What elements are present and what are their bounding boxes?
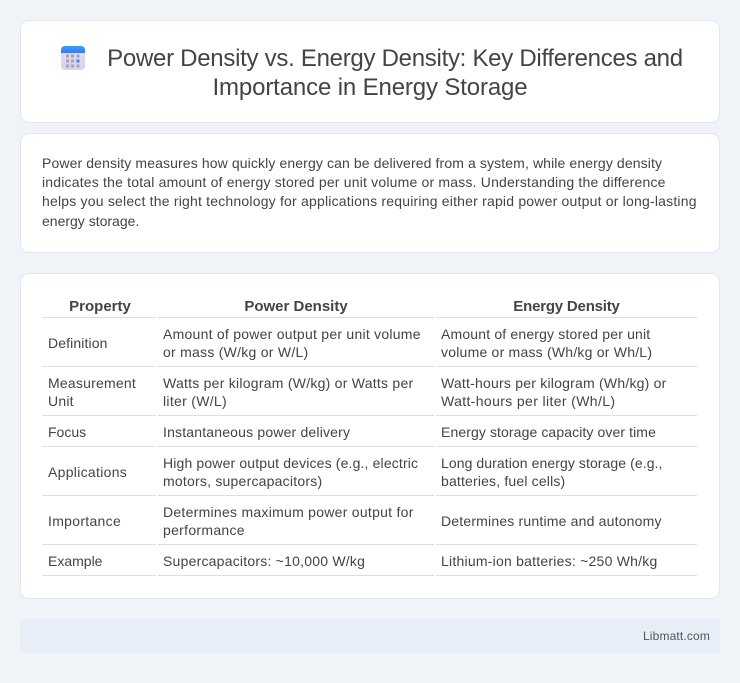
panel: introduction card bbox=[20, 133, 720, 253]
heading: title bbox=[107, 45, 683, 101]
row: applications bbox=[48, 455, 663, 489]
header row bbox=[69, 298, 620, 315]
text block: introduction: indicates the total amount of energy stored per unit volume or mass. Understanding the difference bbox=[42, 174, 666, 190]
row: definition: Definition bbox=[48, 335, 108, 351]
icon: calendar bbox=[61, 46, 85, 70]
row: example: Supercapacitors: ~10,000 W/kg bbox=[163, 553, 365, 569]
row: importance bbox=[48, 504, 662, 538]
row: measurement unit: Measurement bbox=[48, 375, 136, 391]
panel: comparison table card bbox=[20, 273, 720, 599]
footer text: Libmatt.com bbox=[643, 629, 710, 643]
row: measurement unit: Watt-hours per kilogram (Wh/kg) or bbox=[441, 375, 667, 391]
text block: introduction: Power density measures how quickly energy can be delivered from a system, while energy density bbox=[42, 155, 662, 171]
row: example bbox=[48, 553, 658, 569]
row: importance: performance bbox=[163, 522, 245, 538]
row: example: Lithium-ion batteries: ~250 Wh/kg bbox=[441, 553, 658, 569]
panel: title card bbox=[20, 20, 720, 123]
row: measurement unit: Unit bbox=[48, 393, 74, 409]
row: focus: Energy storage capacity over time bbox=[441, 424, 656, 440]
row: measurement unit: Watts per kilogram (W/kg) or Watts per bbox=[163, 375, 413, 391]
row: importance: Determines runtime and autonomy bbox=[441, 513, 662, 529]
row: example: Example bbox=[48, 553, 102, 569]
row: definition: or mass (W/kg or W/L) bbox=[163, 344, 308, 360]
row: focus bbox=[48, 424, 656, 440]
text block: introduction: helps you select the right technology for applications requiring either rapid power output or long-lasting bbox=[42, 193, 697, 209]
row: importance: Importance bbox=[48, 513, 121, 529]
table: comparison bbox=[42, 298, 697, 576]
text block: introduction: energy storage. bbox=[42, 213, 139, 229]
row: applications: batteries, fuel cells) bbox=[441, 473, 565, 489]
row: definition: Amount of energy stored per unit bbox=[441, 326, 650, 342]
row: importance: Determines maximum power output for bbox=[163, 504, 414, 520]
header row: Energy Density bbox=[513, 298, 620, 315]
row: measurement unit: liter (W/L) bbox=[163, 393, 227, 409]
row: definition: Amount of power output per unit volume bbox=[163, 326, 421, 342]
row: definition: volume or mass (Wh/kg or Wh/L) bbox=[441, 344, 652, 360]
row: applications: Long duration energy storage (e.g., bbox=[441, 455, 663, 471]
row: applications: motors, supercapacitors) bbox=[163, 473, 322, 489]
row: measurement unit: Watt-hours per liter (Wh/L) bbox=[441, 393, 615, 409]
row: applications: Applications bbox=[48, 464, 127, 480]
row: focus: Instantaneous power delivery bbox=[163, 424, 350, 440]
row: definition bbox=[48, 326, 652, 360]
row: focus: Focus bbox=[48, 424, 86, 440]
row: applications: High power output devices (e.g., electric bbox=[163, 455, 418, 471]
row: measurement unit bbox=[48, 375, 667, 409]
heading: title: Power Density vs. Energy Density: Key Differences and bbox=[107, 45, 683, 72]
heading: title: Importance in Energy Storage bbox=[213, 74, 527, 101]
header row: Property bbox=[69, 298, 131, 315]
header row: Power Density bbox=[244, 298, 348, 315]
footer bar bbox=[20, 619, 720, 653]
text block: introduction bbox=[42, 155, 697, 229]
